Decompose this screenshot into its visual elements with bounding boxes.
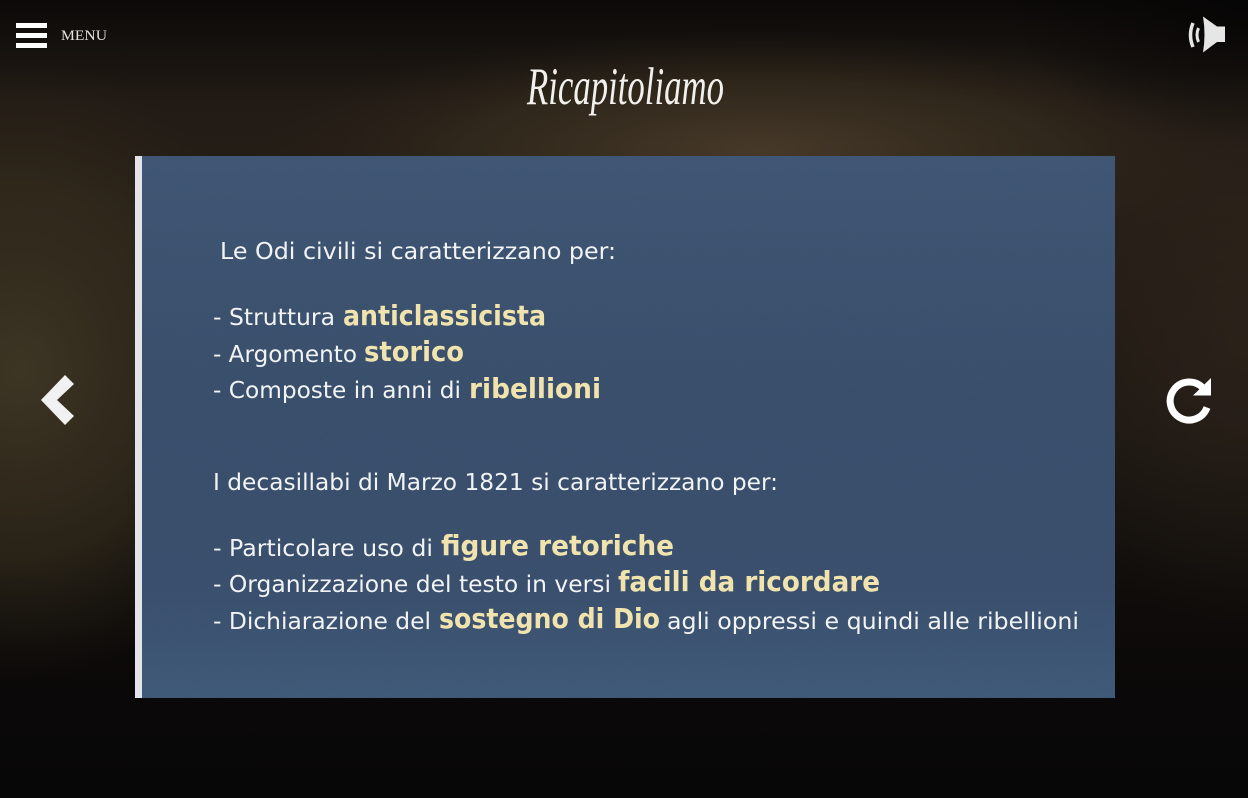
list: Odi civili: storico <box>364 335 464 368</box>
title: Ricapitoliamo <box>526 58 724 116</box>
icon: speaker <box>1190 16 1225 52</box>
list: decasillabi: facili da ricordare <box>618 565 880 598</box>
list: decasillabi: - Particolare uso di <box>213 536 433 562</box>
list: decasillabi: - Organizzazione del testo in versi <box>213 572 611 598</box>
panel background <box>135 156 1115 698</box>
panel left border <box>135 156 142 698</box>
list: Odi civili: - Argomento <box>213 342 357 368</box>
menu label: MENU <box>61 28 107 44</box>
list: decasillabi: figure retoriche <box>441 529 674 562</box>
menu button <box>16 23 107 48</box>
list: decasillabi: - Dichiarazione del <box>213 609 431 635</box>
list: Odi civili: ribellioni <box>469 372 601 405</box>
list: Odi civili: anticlassicista <box>343 299 546 332</box>
list: decasillabi: agli oppressi e quindi alle ribellioni <box>667 609 1079 635</box>
icon: replay arrow <box>1170 378 1211 420</box>
icon: hamburger menu <box>16 23 47 48</box>
list: decasillabi: sostegno di Dio <box>439 602 660 635</box>
list: Odi civili <box>213 299 601 405</box>
list: Odi civili: - Composte in anni di <box>213 378 461 404</box>
list: decasillabi <box>213 529 1079 635</box>
list: Odi civili: - Struttura <box>213 305 335 331</box>
heading: decasillabi: I decasillabi di Marzo 1821 si caratterizzano per: <box>213 470 778 496</box>
icon: back arrow <box>41 375 74 425</box>
heading: Odi civili: Le Odi civili si caratterizzano per: <box>220 239 616 265</box>
panel: recap <box>135 156 1115 698</box>
